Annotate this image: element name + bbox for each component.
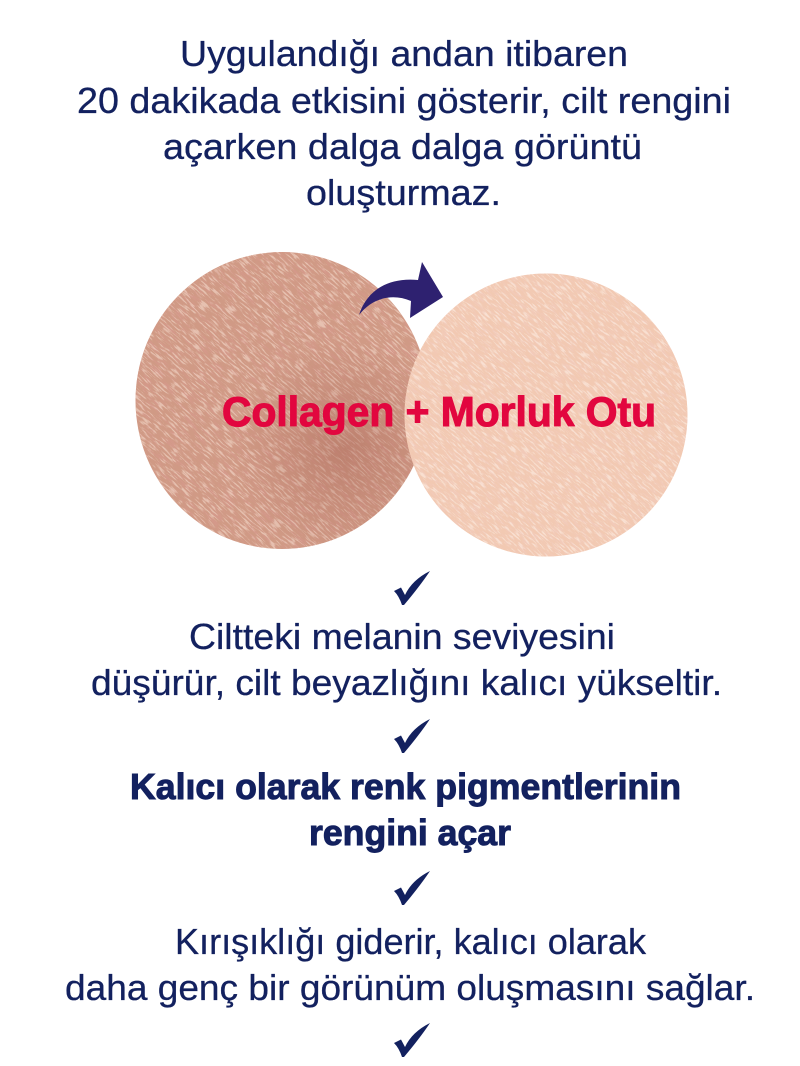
left circle: skin before (136, 252, 420, 549)
text block: wrinkles: Kırışıklığı giderir, kalıcı olarak (175, 921, 647, 962)
heading (77, 33, 731, 213)
text block: pigments (bold) (130, 766, 681, 853)
text block: pigments (bold): rengini açar (309, 812, 511, 853)
arrow (359, 262, 443, 318)
heading: açarken dalga dalga görüntü (163, 126, 642, 167)
heading: 20 dakikada etkisini gösterir, cilt rengini (77, 80, 731, 121)
text block: melanin (91, 616, 722, 703)
product label: Collagen + Morluk Otu (222, 388, 656, 435)
icon: check mark 3 (394, 871, 430, 905)
icon: check mark 2 (394, 719, 430, 753)
text block: pigments (bold): Kalıcı olarak renk pigmentlerinin (130, 766, 681, 807)
text block: wrinkles (65, 921, 755, 1008)
heading: Uygulandığı andan itibaren (180, 33, 628, 74)
icon: check mark 1 (394, 571, 430, 605)
panel: before and after skin comparison (136, 252, 688, 556)
text block: wrinkles: daha genç bir görünüm oluşmasını sağlar. (65, 967, 755, 1008)
icon: check mark 4 (394, 1023, 430, 1057)
heading: oluşturmaz. (306, 172, 501, 213)
text block: melanin: Ciltteki melanin seviyesini (189, 616, 615, 657)
text block: melanin: düşürür, cilt beyazlığını kalıcı yükseltir. (91, 662, 722, 703)
right circle: skin after (404, 274, 688, 556)
